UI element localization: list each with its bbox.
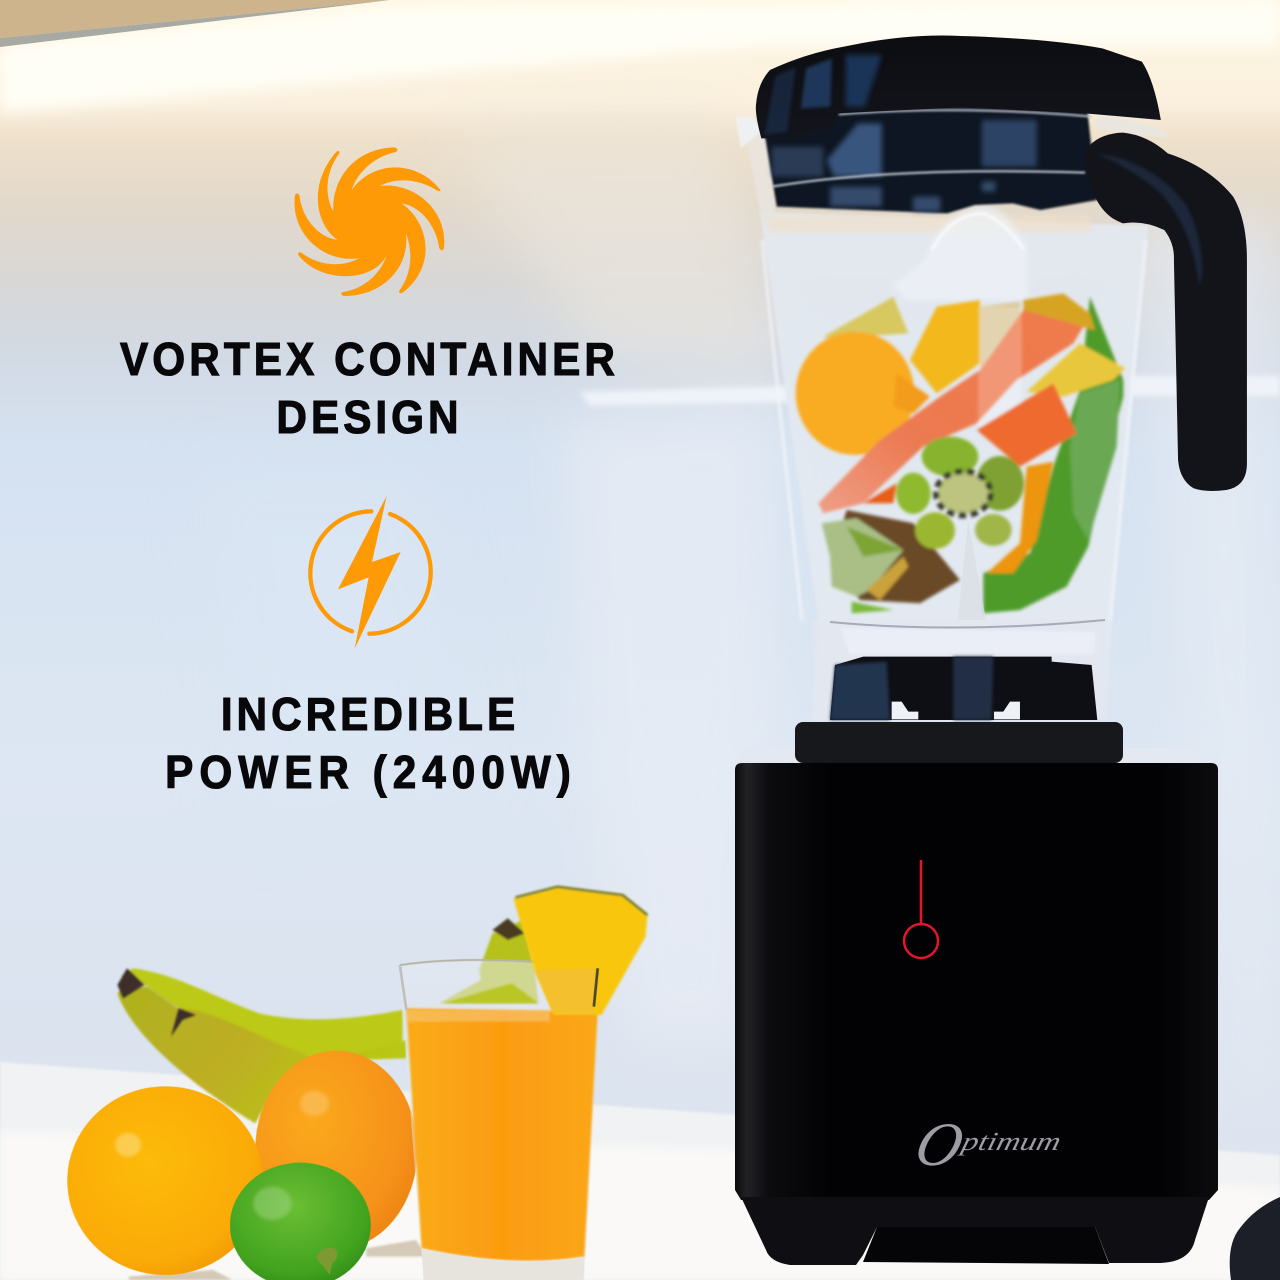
fruit still life (67, 887, 647, 1280)
brand logo: ptimum (957, 1126, 1064, 1156)
heading: incredible power: POWER (2400W) (165, 747, 571, 798)
icon: power bolt (310, 496, 431, 649)
table shadow (129, 1240, 427, 1280)
jar collar and rim (735, 105, 1168, 213)
heading: incredible power (165, 689, 571, 798)
heading: incredible power: INCREDIBLE (221, 689, 515, 740)
blade base socket (830, 657, 1097, 720)
lid (756, 36, 1161, 138)
motor collar (795, 722, 1123, 763)
fruit inside jar (796, 293, 1125, 613)
front banana (117, 987, 406, 1123)
heading: vortex container design: VORTEX CONTAINER (120, 334, 615, 385)
juice glass (399, 959, 600, 1280)
jar body (745, 130, 1148, 722)
blender (733, 36, 1247, 1265)
counter shelf highlight (733, 748, 1210, 763)
icon: vortex (294, 147, 444, 296)
lime (230, 1163, 371, 1280)
rear banana stem (439, 918, 538, 1003)
heading: vortex container design: DESIGN (276, 392, 459, 443)
motor base (735, 763, 1218, 1265)
orange back (255, 1051, 417, 1249)
orange front (67, 1086, 263, 1275)
counter top (0, 1062, 1280, 1280)
brand logo: O (909, 1110, 971, 1179)
pineapple (513, 887, 647, 1015)
banana tips (117, 968, 196, 1037)
heading: vortex container design (120, 334, 615, 443)
jar handle (1083, 133, 1247, 491)
back banana (121, 968, 403, 1059)
ceiling glow (0, 0, 1280, 112)
tamper handle (1230, 1197, 1280, 1280)
blade spire (958, 520, 986, 620)
red power indicator (904, 860, 938, 958)
